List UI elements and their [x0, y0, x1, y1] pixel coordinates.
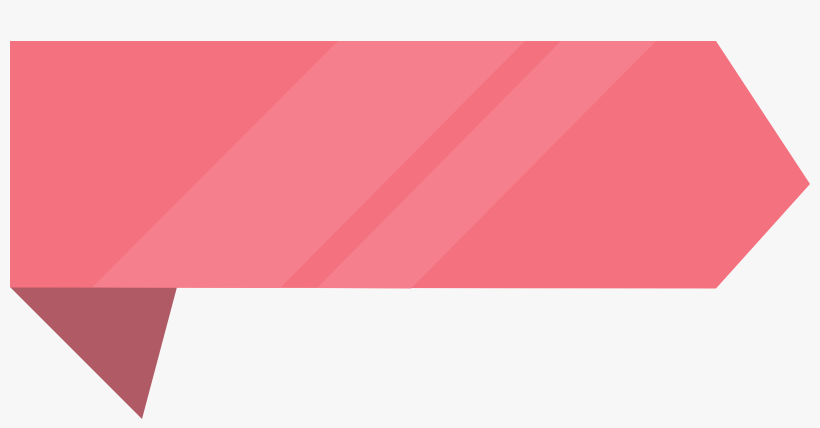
wide diagonal stripe	[92, 41, 525, 288]
folded ribbon tail	[10, 287, 177, 419]
narrow diagonal stripe	[317, 41, 656, 288]
banner arrow body	[10, 41, 810, 288]
